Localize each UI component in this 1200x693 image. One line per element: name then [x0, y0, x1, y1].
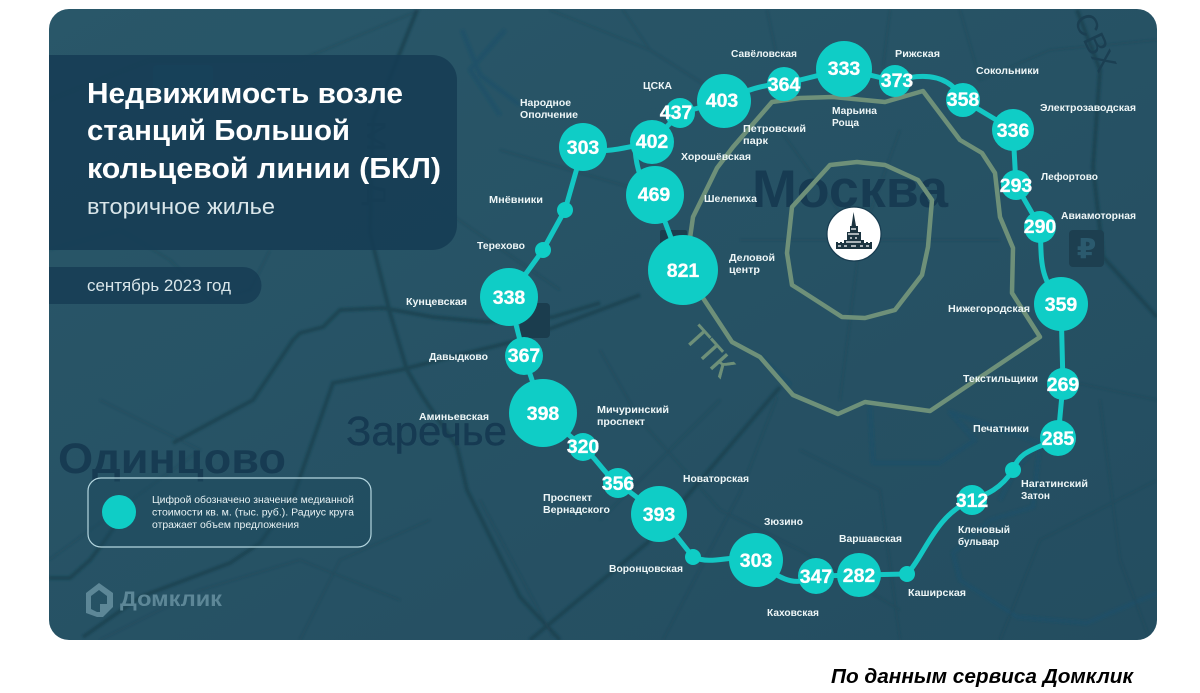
station names: Электрозаводская: [1040, 103, 1136, 114]
logo: Домклик: [86, 583, 223, 617]
map label: Заречье: Заречье: [346, 408, 507, 454]
metro line: [509, 69, 1063, 581]
station names: Нагатинский: [1021, 479, 1088, 490]
station names: Народное: [520, 98, 571, 109]
station names: центр: [729, 265, 760, 276]
station values: 269: [1047, 374, 1079, 396]
station values: 469: [638, 184, 670, 206]
icon: Kremlin tower: [827, 207, 881, 261]
station names: Вернадского: [543, 505, 610, 516]
title panel: [49, 55, 457, 250]
station values: 290: [1024, 216, 1056, 238]
station names: Ополчение: [520, 110, 578, 121]
station names: проспект: [597, 417, 645, 428]
station values: [493, 58, 1079, 588]
station names: Савёловская: [731, 49, 797, 60]
station names: Хорошёвская: [681, 152, 751, 163]
station values: 364: [768, 74, 800, 96]
station values: 320: [567, 436, 599, 458]
logo: Домклик: Домклик: [120, 588, 223, 611]
station values: 336: [997, 120, 1029, 142]
station values: 358: [947, 89, 979, 111]
source note: По данным сервиса Домклик: [831, 666, 1134, 688]
station names: Проспект: [543, 493, 592, 504]
map label: Москва: Москва: [752, 160, 949, 219]
map badges: road markers: [520, 230, 687, 338]
map badge: M-9: [153, 65, 213, 93]
station values: 338: [493, 287, 525, 309]
station values: 303: [740, 550, 772, 572]
station values: 312: [956, 490, 988, 512]
station names: Печатники: [973, 424, 1029, 435]
station values: 821: [667, 260, 699, 282]
legend: [88, 478, 371, 547]
station values: 373: [881, 70, 913, 92]
station names: ЦСКА: [643, 81, 672, 92]
station values: 393: [643, 504, 675, 526]
station values: 437: [660, 102, 692, 124]
station names: Воронцовская: [609, 564, 683, 575]
station names: Давыдково: [429, 352, 488, 363]
station names: Зюзино: [764, 517, 803, 528]
outer ring: ТТК: [690, 91, 1040, 414]
station values: 356: [602, 473, 634, 495]
station names: Шелепиха: [704, 194, 757, 205]
station values: 333: [828, 58, 860, 80]
legend: стоимости кв. м. (тыс. руб.). Радиус круга: [152, 506, 354, 518]
legend: отражает объем предложения: [152, 519, 299, 531]
station names: Терехово: [477, 241, 525, 252]
legend: Цифрой обозначено значение медианной: [152, 494, 354, 506]
station values: 282: [843, 565, 875, 587]
station names: Каховская: [767, 608, 819, 619]
station names: Деловой: [729, 253, 775, 264]
station names: Аминьевская: [419, 412, 489, 423]
station names: Сокольники: [976, 66, 1039, 77]
title: кольцевой линии (БКЛ): [87, 153, 441, 185]
station names: Марьина: [832, 106, 877, 117]
station values: 402: [636, 131, 668, 153]
title: [87, 78, 441, 185]
station values: 398: [527, 403, 559, 425]
station values: 285: [1042, 428, 1074, 450]
title: станций Большой: [87, 115, 350, 147]
date pill: сентябрь 2023 год: [87, 276, 231, 295]
station values: 303: [567, 137, 599, 159]
title: Недвижимость возле: [87, 78, 403, 110]
station names: Затон: [1021, 491, 1050, 502]
station names: [406, 49, 1136, 619]
station values: 293: [1000, 175, 1032, 197]
station names: Роща: [832, 118, 859, 129]
inner ring: [787, 162, 932, 318]
station names: парк: [743, 136, 769, 147]
station names: Каширская: [908, 588, 966, 599]
map label: СВХ: СВХ: [1067, 8, 1122, 77]
station names: Лефортово: [1041, 171, 1098, 183]
station names: Текстильщики: [963, 374, 1038, 385]
label: ТТК: ТТК: [678, 319, 741, 384]
date pill: [49, 267, 261, 304]
station names: Рижская: [895, 49, 940, 60]
station names: Новаторская: [683, 474, 749, 485]
station names: Кунцевская: [406, 297, 467, 308]
map label: Одинцово: Одинцово: [58, 435, 286, 483]
station names: Варшавская: [839, 534, 902, 545]
station names: Нижегородская: [948, 304, 1030, 315]
station names: Мнёвники: [489, 195, 543, 206]
map label: МЦД: МЦД: [361, 120, 391, 206]
station values: 367: [508, 345, 540, 367]
station values: 403: [706, 90, 738, 112]
station names: Авиамоторная: [1061, 211, 1136, 222]
map badge: ruble: [1069, 230, 1104, 267]
station names: Кленовый: [958, 525, 1010, 536]
station values: 359: [1045, 294, 1077, 316]
station circles: [480, 41, 1088, 597]
station values: 347: [800, 566, 832, 588]
station names: бульвар: [958, 536, 999, 548]
map badge: ruble: ₽: [1077, 232, 1096, 265]
station names: Петровский: [743, 124, 806, 135]
station names: Мичуринский: [597, 405, 669, 416]
subtitle: вторичное жилье: [87, 194, 275, 219]
